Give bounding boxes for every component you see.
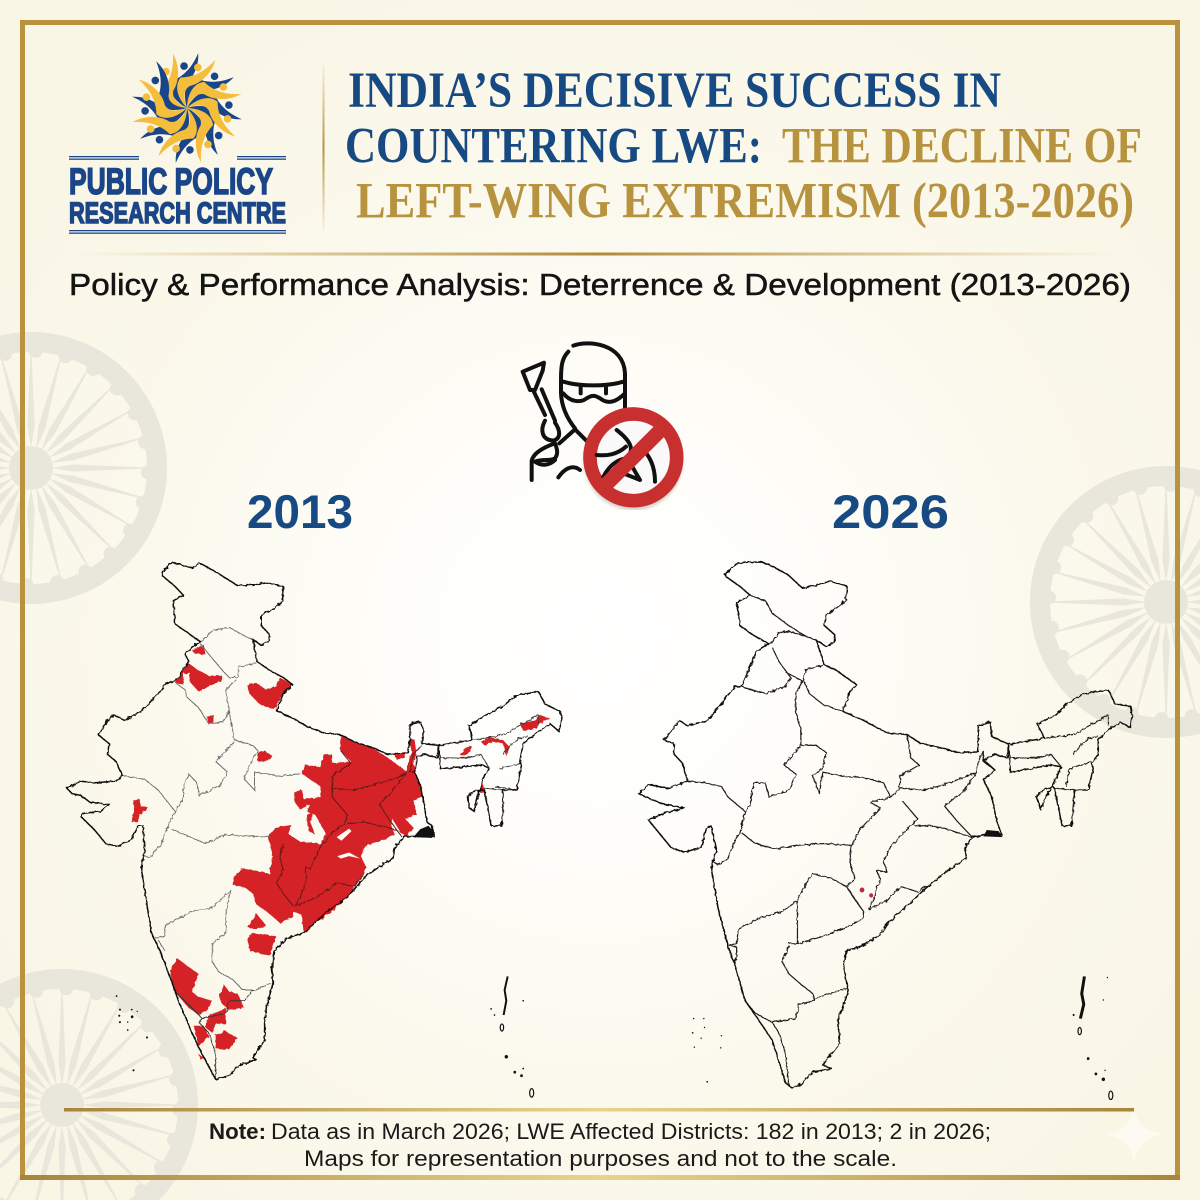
logo: Public Policy Research Centre <box>69 52 286 234</box>
title <box>345 63 1142 230</box>
logo name: PUBLIC POLICY <box>69 161 273 202</box>
note text: Maps for representation purposes and not to the scale. <box>304 1146 897 1171</box>
Sundarbans delta <box>413 826 435 838</box>
map: India 2026 <box>638 560 1134 1100</box>
LWE affected regions 2013 <box>131 645 550 1060</box>
Sundarbans delta <box>983 830 1003 837</box>
watermark: chakra wheel right <box>1030 466 1200 738</box>
header vertical divider <box>322 60 324 235</box>
state borders 2013 <box>123 628 300 990</box>
header rule <box>76 252 1118 256</box>
south and northeast inner borders <box>175 715 538 1078</box>
state borders 2026 <box>688 595 1108 1086</box>
note text: Data as in March 2026; LWE Affected Districts: 182 in 2013; 2 in 2026; <box>271 1119 991 1144</box>
unaffected pockets <box>337 819 400 859</box>
title: INDIA’S DECISIVE SUCCESS IN <box>348 63 1001 119</box>
watermark: chakra wheel bottom left <box>0 969 198 1200</box>
country outline 2013 <box>67 562 562 1079</box>
map: India 2013 <box>66 562 563 1098</box>
state borders inside affected area <box>276 745 422 906</box>
year label 2013: 2013 <box>247 485 353 538</box>
year label 2026: 2026 <box>832 485 949 538</box>
note text: Note: <box>209 1119 266 1144</box>
title: COUNTERING LWE: <box>345 118 762 174</box>
decorative sparkle <box>1106 1108 1163 1162</box>
Andaman and Nicobar islands <box>1073 976 1113 1100</box>
logo rules <box>69 156 286 234</box>
icon: banned militant with rifle <box>520 341 684 510</box>
logo name: RESEARCH CENTRE <box>69 197 286 230</box>
watermark: chakra wheel left <box>0 332 167 604</box>
footer rule <box>64 1108 1134 1112</box>
country outline 2026 <box>639 562 1132 1088</box>
remaining affected districts <box>860 888 873 898</box>
subtitle: Policy & Performance Analysis: Deterrence & Development (2013-2026) <box>69 267 1131 302</box>
note text <box>209 1119 991 1171</box>
Lakshadweep islands <box>692 1018 722 1083</box>
logo emblem: swirl of figures <box>131 52 243 164</box>
Andaman and Nicobar islands <box>490 976 534 1097</box>
Lakshadweep islands <box>116 995 148 1071</box>
